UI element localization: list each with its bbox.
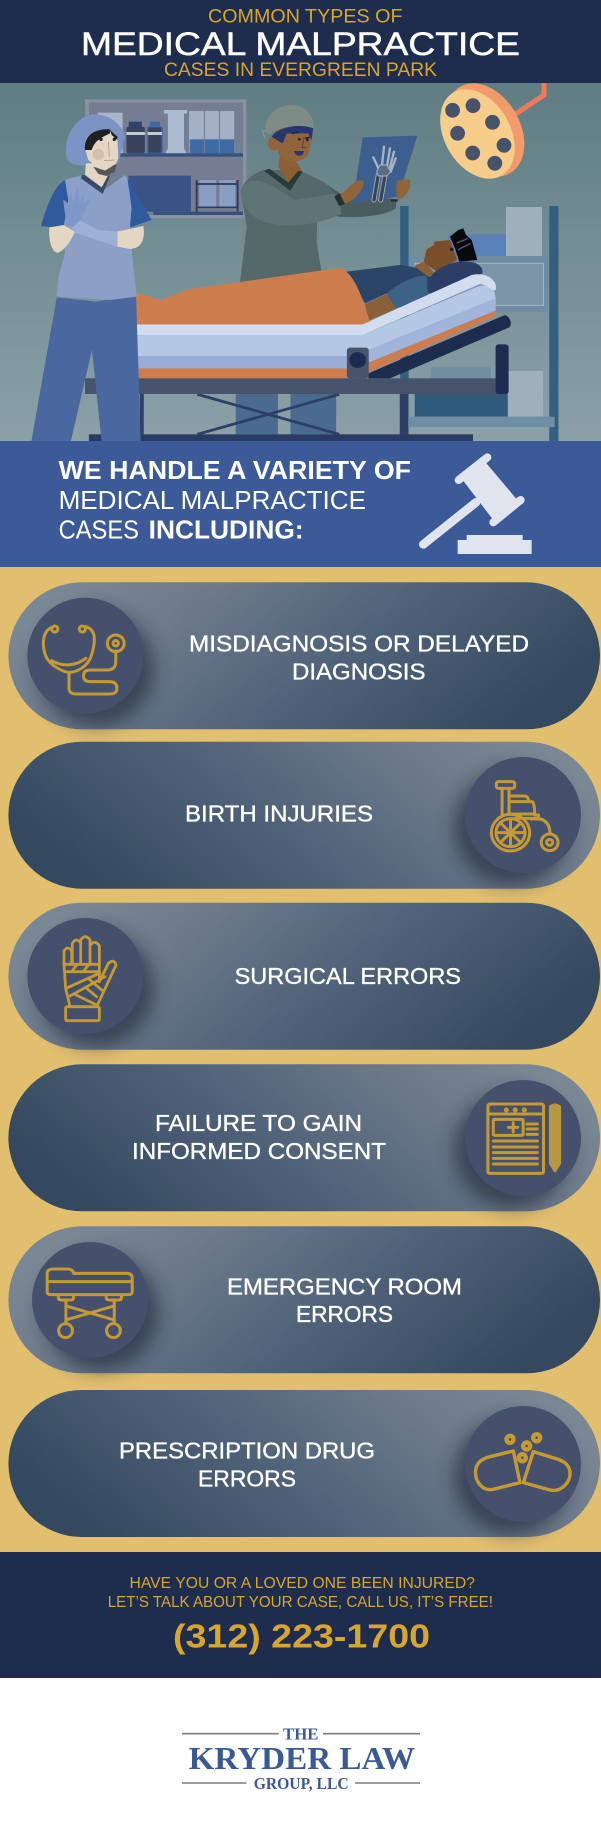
title line 1: COMMON TYPES OF [208,7,402,28]
label [119,1438,375,1492]
logo: the kryder law group [182,1725,420,1793]
nurse [31,114,152,441]
label: ERRORS [296,1301,393,1327]
label: FAILURE TO GAIN [155,1110,362,1136]
label [227,1274,462,1327]
doctor [236,105,417,434]
banner heading: INCLUDING: [149,515,304,545]
icon: medical form and pencil [488,1104,560,1173]
label [132,1110,386,1164]
case 1: misdiagnosis [8,582,600,729]
icon: gavel [423,457,532,554]
white footer background [0,1678,601,1836]
label: MISDIAGNOSIS OR DELAYED [189,631,529,657]
call to action band [0,1552,601,1678]
bed frame [85,344,509,441]
cta text: HAVE YOU OR A LOVED ONE BEEN INJURED? [130,1575,475,1592]
banner heading [59,455,411,545]
banner: we handle [0,441,601,567]
logo: the kryder law group: KRYDER LAW [189,1740,415,1776]
logo: the kryder law group: THE [283,1725,318,1744]
title line 3: CASES IN EVERGREEN PARK [164,60,437,81]
case 6: prescription drugs [8,1390,600,1537]
label: DIAGNOSIS [292,659,426,685]
case 5: emergency room [8,1226,600,1373]
label: SURGICAL ERRORS [235,963,461,989]
hospital room illustration [0,69,601,443]
phone number: (312) 223-1700 [173,1618,430,1655]
label: PRESCRIPTION DRUG [119,1438,375,1464]
main title: MEDICAL MALPRACTICE [81,26,520,62]
x-ray hand bones [373,147,396,200]
surgical lamp [425,69,544,192]
icon: wheelchair [491,782,558,851]
label: INFORMED CONSENT [132,1138,386,1164]
banner heading: CASES [59,515,139,545]
icon: stretcher [47,1269,132,1338]
medicine cabinet [85,99,246,218]
icon: bandaged hand [64,937,116,1021]
banner heading: MEDICAL MALPRACTICE [59,485,366,515]
banner heading: WE HANDLE A VARIETY OF [59,455,411,485]
icon: broken capsule [476,1434,570,1490]
icon: stethoscope [43,626,124,694]
gold list background [0,567,601,1552]
label: BIRTH INJURIES [185,801,373,827]
cta text: LET’S TALK ABOUT YOUR CASE, CALL US, IT’S FREE! [108,1594,493,1611]
case 3: surgical errors [8,903,600,1050]
logo: the kryder law group: GROUP, LLC [254,1774,349,1793]
case 2: birth injuries [8,742,600,889]
label [189,631,529,685]
cta text [108,1575,493,1611]
patient on bed [136,228,511,378]
label: EMERGENCY ROOM [227,1274,462,1300]
monitor equipment [400,206,558,441]
case 4: informed consent [8,1064,600,1211]
blanket [136,268,370,324]
header band [0,0,601,83]
label: ERRORS [198,1466,296,1492]
